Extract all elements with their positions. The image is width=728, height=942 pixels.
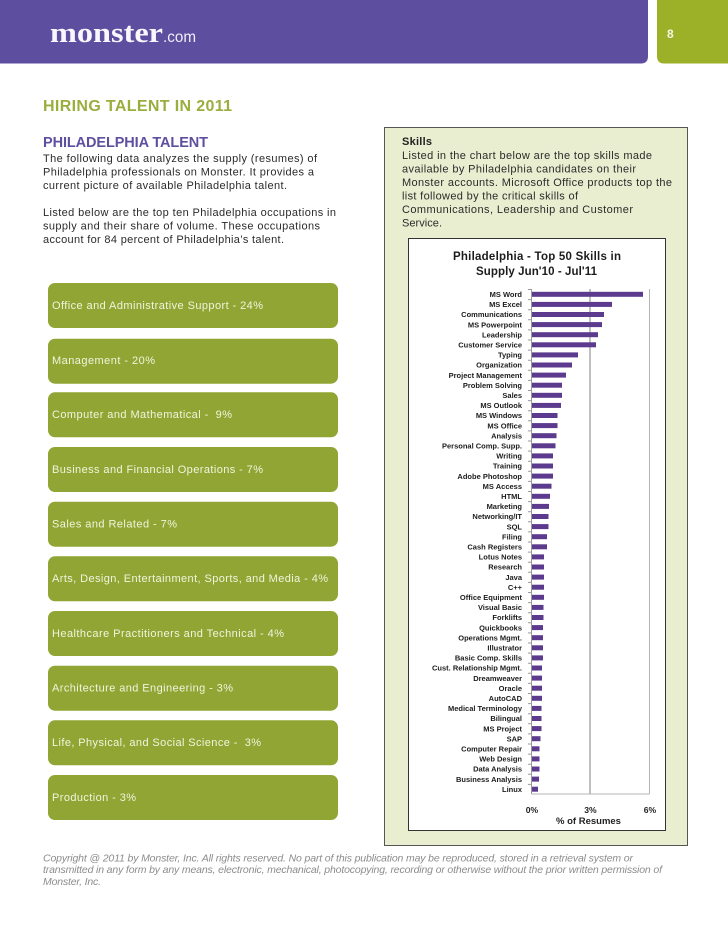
row: Typing bbox=[498, 351, 578, 360]
row: Operations Mgmt.: Operations Mgmt. bbox=[458, 633, 522, 642]
chart title: Philadelphia - Top 50 Skills in bbox=[453, 251, 621, 263]
occupation: architecture and engineering bbox=[48, 666, 338, 711]
occupation: business and financial operations: Business and Financial Operations - 7% bbox=[52, 464, 263, 476]
occupation: management bbox=[48, 339, 338, 384]
row: MS Access: MS Access bbox=[483, 482, 522, 491]
row: Adobe Photoshop: Adobe Photoshop bbox=[457, 472, 522, 481]
row: Dreamweaver: Dreamweaver bbox=[473, 674, 522, 683]
row: Cust. Relationship Mgmt.: Cust. Relationship Mgmt. bbox=[432, 664, 522, 673]
row: Basic Comp. Skills: Basic Comp. Skills bbox=[455, 654, 522, 663]
chart title bbox=[453, 251, 621, 278]
occupation: healthcare bbox=[48, 611, 338, 656]
row: Research bbox=[488, 563, 544, 572]
occupation: office and administrative support: Office and Administrative Support - 24% bbox=[52, 300, 263, 312]
row: Filing bbox=[502, 532, 547, 541]
text block: introduction: supply and their share of volume. These occupations bbox=[43, 220, 320, 232]
occupation: office and administrative support bbox=[48, 283, 338, 328]
occupation: management: Management - 20% bbox=[52, 355, 155, 367]
logo: monster.com: monster bbox=[50, 17, 163, 49]
row: Quickbooks: Quickbooks bbox=[479, 623, 522, 632]
row: Marketing: Marketing bbox=[487, 502, 522, 511]
row: Writing bbox=[496, 452, 553, 461]
row: Web Design: Web Design bbox=[479, 755, 522, 764]
logo: monster.com: .com bbox=[163, 29, 196, 46]
occupation: life, physical and social science: Life, Physical, and Social Science - 3% bbox=[52, 737, 261, 749]
row: SAP bbox=[507, 734, 540, 743]
row: Forklifts: Forklifts bbox=[492, 613, 522, 622]
row: Adobe Photoshop bbox=[457, 472, 553, 481]
row: MS Office: MS Office bbox=[487, 421, 522, 430]
row: C++ bbox=[508, 583, 544, 592]
text block: skills description: Monster accounts. Microsoft Office products top the bbox=[402, 177, 672, 189]
row: Lotus Notes bbox=[479, 553, 544, 562]
row: Cash Registers bbox=[467, 542, 547, 552]
row: MS Powerpoint bbox=[468, 320, 602, 329]
row: Medical Terminology: Medical Terminology bbox=[448, 704, 523, 713]
copyright footer: transmitted in any form by any means, electronic, mechanical, photocopying, recording or otherwise without the prior written permission of bbox=[43, 864, 663, 876]
occupation: production: Production - 3% bbox=[52, 792, 136, 804]
occupation: sales and related: Sales and Related - 7% bbox=[52, 518, 177, 530]
row: HTML: HTML bbox=[501, 492, 522, 501]
row: MS Office bbox=[487, 421, 558, 430]
row: MS Project bbox=[483, 724, 542, 733]
row: Customer Service bbox=[458, 340, 596, 350]
row: MS Powerpoint: MS Powerpoint bbox=[468, 320, 522, 329]
text block: introduction: Philadelphia professionals on Monster. It provides a bbox=[43, 166, 315, 178]
occupation: life, physical and social science bbox=[48, 720, 338, 765]
occupation: production bbox=[48, 775, 338, 820]
chart axis labels bbox=[526, 805, 657, 827]
row: AutoCAD bbox=[489, 694, 542, 703]
occupation: architecture and engineering: Architecture and Engineering - 3% bbox=[52, 682, 233, 694]
row: Sales bbox=[502, 391, 562, 400]
row: Visual Basic bbox=[478, 603, 544, 612]
occupation: computer and mathematical bbox=[48, 392, 338, 437]
chart axis labels: % of Resumes bbox=[556, 816, 621, 827]
row: MS Project: MS Project bbox=[483, 724, 522, 733]
text block: introduction: account for 84 percent of Philadelphia’s talent. bbox=[43, 234, 284, 246]
text block: skills description: Skills bbox=[402, 136, 432, 148]
row: MS Outlook: MS Outlook bbox=[480, 401, 523, 410]
row: Computer Repair: Computer Repair bbox=[461, 744, 522, 753]
text block: introduction: The following data analyzes the supply (resumes) of bbox=[43, 153, 318, 165]
copyright footer bbox=[43, 852, 663, 888]
row: Linux bbox=[502, 785, 538, 794]
row: Analysis: Analysis bbox=[491, 431, 522, 440]
row: Filing: Filing bbox=[502, 532, 522, 541]
row: Java: Java bbox=[505, 573, 523, 582]
row: Java bbox=[505, 573, 544, 582]
row: MS Outlook bbox=[480, 401, 561, 410]
text block: skills description bbox=[402, 136, 672, 230]
occupation: business and financial operations bbox=[48, 447, 338, 492]
row: MS Excel bbox=[489, 300, 612, 309]
row: SQL bbox=[507, 522, 548, 531]
occupation: arts, design, entertainment: Arts, Design, Entertainment, Sports, and Media - 4% bbox=[52, 573, 328, 585]
occupation: healthcare: Healthcare Practitioners and Technical - 4% bbox=[52, 628, 284, 640]
row: Leadership: Leadership bbox=[482, 330, 522, 339]
row: Communications bbox=[461, 310, 604, 319]
row: Data Analysis: Data Analysis bbox=[473, 765, 522, 774]
chart axis labels: 3% bbox=[584, 805, 597, 815]
row: Communications: Communications bbox=[461, 310, 522, 319]
row: Problem Solving bbox=[463, 381, 562, 390]
panel: skills bbox=[384, 128, 688, 846]
row: Marketing bbox=[487, 502, 549, 511]
row: Networking/IT bbox=[472, 512, 548, 521]
row: Quickbooks bbox=[479, 623, 543, 632]
chart: top 50 skills bbox=[408, 238, 666, 830]
row: Networking/IT: Networking/IT bbox=[472, 512, 522, 521]
row: C++: C++ bbox=[508, 583, 523, 592]
row: Project Management bbox=[449, 371, 566, 380]
occupation: arts, design, entertainment bbox=[48, 556, 338, 601]
row: Leadership bbox=[482, 330, 598, 339]
row: MS Excel: MS Excel bbox=[489, 300, 522, 309]
row: Training bbox=[493, 462, 553, 471]
row: Linux: Linux bbox=[502, 785, 523, 794]
row: Analysis bbox=[491, 431, 556, 440]
text block: introduction: current picture of available Philadelphia talent. bbox=[43, 180, 287, 192]
row: Bilingual: Bilingual bbox=[490, 714, 522, 723]
chart title: Supply Jun'10 - Jul'11 bbox=[476, 266, 598, 278]
row: Oracle: Oracle bbox=[499, 684, 522, 693]
title: HIRING TALENT IN 2011 bbox=[43, 98, 232, 115]
row: Cash Registers: Cash Registers bbox=[467, 542, 522, 551]
row: MS Word: MS Word bbox=[490, 290, 522, 299]
row: Forklifts bbox=[492, 613, 544, 622]
text block: skills description: Communications, Leadership and Customer bbox=[402, 204, 633, 216]
row: Personal Comp. Supp.: Personal Comp. Supp. bbox=[442, 441, 522, 450]
row: HTML bbox=[501, 492, 550, 501]
header band bbox=[0, 0, 648, 64]
row: AutoCAD: AutoCAD bbox=[489, 694, 523, 703]
row: Typing: Typing bbox=[498, 351, 522, 360]
row: SQL: SQL bbox=[507, 522, 522, 531]
row: Customer Service: Customer Service bbox=[458, 340, 522, 349]
copyright footer: Monster, Inc. bbox=[43, 876, 101, 888]
text block: skills description: Listed in the chart below are the top skills made bbox=[402, 150, 652, 162]
row: Project Management: Project Management bbox=[449, 371, 522, 380]
row: Research: Research bbox=[488, 563, 522, 572]
row: Business Analysis: Business Analysis bbox=[456, 775, 522, 784]
row: MS Access bbox=[483, 482, 552, 491]
occupation: sales and related bbox=[48, 502, 338, 547]
occupation list bbox=[48, 283, 338, 820]
page number tab: 8 bbox=[667, 27, 674, 41]
chart axis labels: 6% bbox=[644, 805, 657, 815]
row: Illustrator bbox=[487, 644, 543, 652]
text block: skills description: available by Philadelphia candidates on their bbox=[402, 164, 636, 176]
text block: skills description: list followed by the critical skills of bbox=[402, 190, 579, 202]
occupation: computer and mathematical: Computer and Mathematical - 9% bbox=[52, 409, 232, 421]
logo: monster.com bbox=[50, 17, 196, 49]
row: MS Windows: MS Windows bbox=[476, 411, 522, 420]
text block: introduction bbox=[43, 153, 336, 246]
row: Training: Training bbox=[493, 462, 522, 471]
row: Sales: Sales bbox=[502, 391, 522, 400]
text block: skills description: Service. bbox=[402, 218, 442, 230]
row: Office Equipment: Office Equipment bbox=[460, 593, 522, 602]
row: Visual Basic: Visual Basic bbox=[478, 603, 522, 612]
row: MS Word bbox=[490, 290, 643, 299]
row: Illustrator: Illustrator bbox=[487, 643, 522, 652]
row: Organization bbox=[476, 361, 572, 370]
row: MS Windows bbox=[476, 411, 558, 420]
row: Lotus Notes: Lotus Notes bbox=[479, 553, 522, 562]
copyright footer: Copyright @ 2011 by Monster, Inc. All rights reserved. No part of this publication may be reproduced, stored in a retrieval system or bbox=[43, 852, 634, 864]
text block: introduction: Listed below are the top ten Philadelphia occupations in bbox=[43, 207, 336, 219]
page number tab bbox=[657, 0, 728, 64]
row: Organization: Organization bbox=[476, 361, 522, 370]
row: Problem Solving: Problem Solving bbox=[463, 381, 522, 390]
row: Writing: Writing bbox=[496, 452, 522, 461]
chart axis labels: 0% bbox=[526, 805, 539, 815]
row: Bilingual bbox=[490, 714, 542, 723]
row: Oracle bbox=[499, 684, 542, 693]
heading: Philadelphia talent: PHILADELPHIA TALENT bbox=[43, 135, 208, 151]
row: SAP: SAP bbox=[507, 734, 522, 743]
